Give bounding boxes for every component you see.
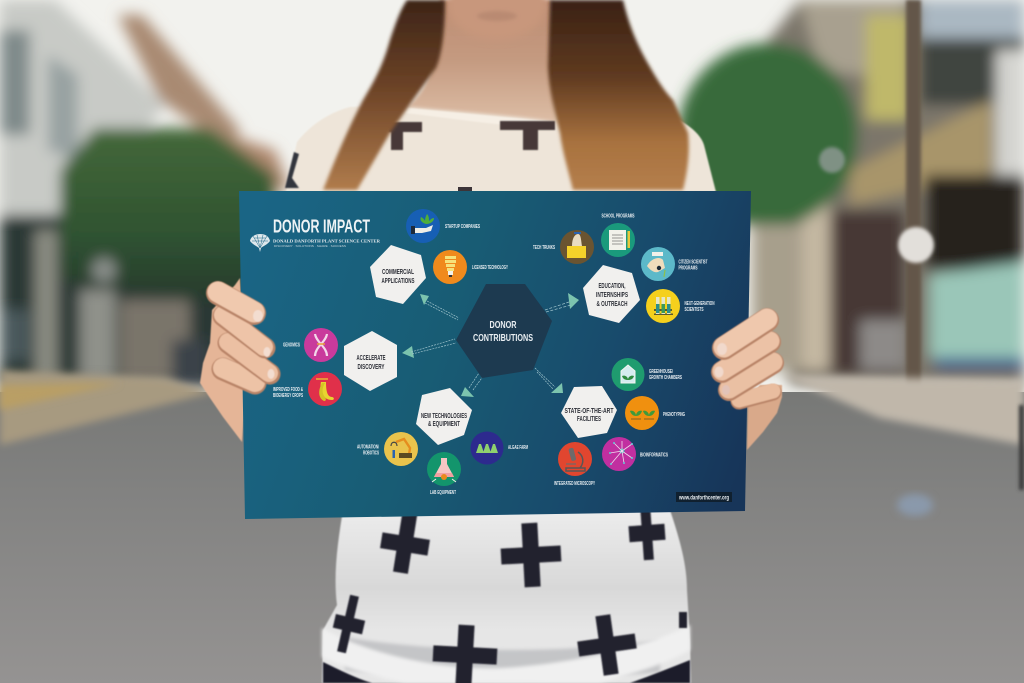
- label: algae farm: ALGAE FARM: [508, 445, 528, 451]
- label: citizen scientist programs: PROGRAMS: [678, 266, 698, 272]
- icon: greenhouse and growth chambers: [612, 358, 644, 391]
- icon: improved food and bioenergy crops: [308, 372, 342, 406]
- person: lower shirt with crosses: [322, 506, 691, 683]
- central hexagon: donor contributions: DONOR: [490, 319, 517, 331]
- label: phenotyping: PHENOTYPING: [663, 412, 685, 418]
- icon: bioinformatics: [602, 437, 636, 471]
- hexagon: education, internships and outreach: & OUTREACH: [596, 299, 628, 308]
- icon: integrated microscopy: [558, 442, 592, 476]
- label: greenhouse and growth chambers: GROWTH CHAMBERS: [649, 375, 682, 381]
- hexagon: state-of-the-art facilities: FACILITIES: [577, 414, 601, 423]
- hexagon: new technologies and equipment: [416, 388, 472, 445]
- label: integrated microscopy: INTEGRATED MICROSCOPY: [554, 481, 595, 487]
- arrow: to commercial applications: [420, 294, 459, 320]
- label: citizen scientist programs: [678, 260, 708, 272]
- hexagon: commercial applications: COMMERCIAL: [382, 267, 414, 276]
- label: genomics: GENOMICS: [283, 342, 300, 348]
- title: DONOR IMPACT: [273, 216, 370, 236]
- website tag: www.danforthcenter.org: [678, 496, 729, 502]
- label: improved food and bioenergy crops: [273, 387, 303, 399]
- hexagon: new technologies and equipment: NEW TECHNOLOGIES: [421, 411, 467, 420]
- icon: licensed technology: [433, 250, 467, 284]
- label: improved food and bioenergy crops: IMPROVED FOOD &: [273, 387, 303, 393]
- label: greenhouse and growth chambers: GREENHOUSE/: [649, 369, 673, 375]
- hexagon: accelerate discovery: [344, 331, 397, 391]
- label: greenhouse and growth chambers: [649, 369, 682, 381]
- poster: [239, 191, 751, 519]
- hexagon: education, internships and outreach: INTERNSHIPS: [596, 290, 628, 299]
- label: automation and robotics: ROBOTICS: [363, 450, 379, 456]
- logo: plant fan: [250, 234, 270, 252]
- left hand fingers over poster: [218, 292, 274, 383]
- hexagon: state-of-the-art facilities: STATE-OF-THE-ART: [564, 406, 614, 415]
- title: [273, 216, 381, 248]
- website tag: [676, 492, 732, 502]
- label: startup companies: STARTUP COMPANIES: [445, 224, 480, 230]
- hexagon: accelerate discovery: DISCOVERY: [358, 362, 384, 371]
- icon: automation and robotics: [384, 432, 418, 466]
- label: lab equipment: LAB EQUIPMENT: [430, 490, 456, 496]
- label: tech trunks: TECH TRUNKS: [533, 245, 555, 251]
- icon: startup companies: [406, 209, 440, 243]
- icon: phenotyping: [625, 396, 659, 430]
- arrow: to new technologies: [461, 373, 484, 397]
- label: bioinformatics: BIOINFORMATICS: [640, 452, 668, 458]
- arrow: to education: [545, 293, 579, 312]
- icon: next-generation scientists: [646, 289, 680, 323]
- hexagon: new technologies and equipment: & EQUIPMENT: [428, 419, 460, 428]
- label: next-generation scientists: NEXT-GENERATION: [684, 301, 715, 307]
- icon: lab equipment: [427, 452, 461, 486]
- label: school programs: SCHOOL PROGRAMS: [602, 214, 635, 220]
- hexagon: education, internships and outreach: EDUCATION,: [598, 281, 626, 290]
- label: automation and robotics: AUTOMATION/: [357, 444, 379, 450]
- hexagon: state-of-the-art facilities: [561, 386, 617, 438]
- label: next-generation scientists: SCIENTISTS: [684, 307, 704, 313]
- title: DISCOVERY · SOLUTIONS · SHARE · SUCCESS: [274, 244, 346, 248]
- label: automation and robotics: [357, 444, 379, 456]
- arrow: to accelerate discovery: [402, 339, 456, 358]
- label: citizen scientist programs: CITIZEN SCIENTIST: [678, 260, 708, 266]
- icon: genomics: [304, 328, 338, 362]
- right hand palm behind poster: [747, 385, 782, 450]
- hexagon: accelerate discovery: ACCELERATE: [356, 353, 386, 362]
- label: next-generation scientists: [684, 301, 715, 313]
- icon: school programs: [601, 223, 635, 257]
- central hexagon: donor contributions: CONTRIBUTIONS: [473, 332, 533, 344]
- hexagon: education, internships and outreach: [583, 265, 640, 323]
- person: neck and shirt top: [285, 0, 716, 192]
- hexagon: commercial applications: [370, 245, 426, 304]
- left hand palm behind poster: [200, 278, 246, 442]
- label: licensed technology: LICENSED TECHNOLOGY: [472, 265, 508, 271]
- central hexagon: donor contributions: [456, 284, 552, 378]
- label: improved food and bioenergy crops: BIOENERGY CROPS: [273, 393, 303, 399]
- icon: tech trunks: [560, 230, 594, 264]
- icon: algae farm: [470, 432, 504, 464]
- hexagon: commercial applications: APPLICATIONS: [382, 276, 414, 285]
- poster background: [239, 191, 751, 519]
- title: DONALD DANFORTH PLANT SCIENCE CENTER: [273, 238, 381, 244]
- icon: citizen scientist programs: [641, 247, 675, 281]
- arrow: to state-of-the-art: [535, 368, 563, 393]
- right hand fingers over poster: [714, 319, 773, 401]
